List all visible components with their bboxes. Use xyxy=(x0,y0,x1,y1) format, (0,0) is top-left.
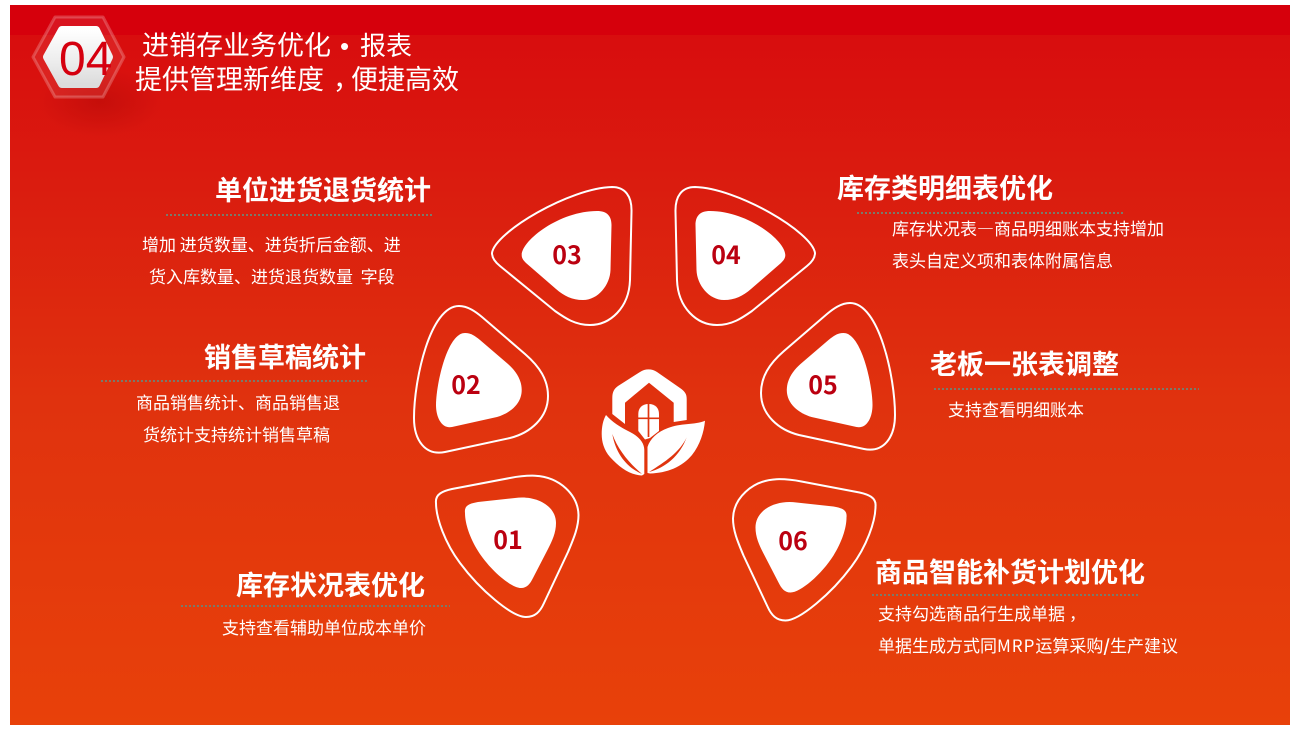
block: 商品智能补货计划优化: ， xyxy=(1069,600,1086,625)
block: 老板一张表调整: 老板一张表调整 xyxy=(930,343,1119,382)
petal 02: 02 xyxy=(451,366,481,402)
block: 单位进货退货统计 xyxy=(142,169,432,288)
title: 提供管理新维度 xyxy=(135,58,324,97)
block: 单位进货退货统计: 单位进货退货统计 xyxy=(215,169,431,208)
title: • xyxy=(340,31,349,61)
title: 便捷高效 xyxy=(351,58,459,97)
petal 04 xyxy=(675,187,815,325)
block: 商品智能补货计划优化: 商品智能补货计划优化 xyxy=(875,551,1145,590)
block: 库存状况表优化 xyxy=(181,564,450,639)
petal 03: 03 xyxy=(552,236,582,272)
block: 库存状况表优化: 库存状况表优化 xyxy=(236,564,425,603)
petal 06 xyxy=(733,479,876,620)
block: 销售草稿统计: 商品销售统计、商品销售退 xyxy=(136,389,340,414)
block: 老板一张表调整 xyxy=(930,343,1199,421)
block: 库存类明细表优化: 库存类明细表优化 xyxy=(837,167,1053,206)
block: 老板一张表调整: 支持查看明细账本 xyxy=(948,396,1084,421)
number badge: 04: 04 xyxy=(59,33,112,86)
number badge: 04 xyxy=(33,17,162,136)
petal 02 xyxy=(414,306,548,453)
title: 报表 xyxy=(360,26,412,63)
block: 销售草稿统计 xyxy=(101,336,367,446)
petal 01 xyxy=(436,476,578,617)
block: 商品智能补货计划优化: 单据生成方式同MRP运算采购/生产建议 xyxy=(878,632,1178,657)
block: 库存类明细表优化: 表头自定义项和表体附属信息 xyxy=(892,247,1113,272)
petal 03 xyxy=(492,187,632,325)
block: 库存类明细表优化: 库存状况表—商品明细账本支持增加 xyxy=(892,215,1164,240)
petal 01: 01 xyxy=(493,521,523,557)
title xyxy=(135,24,459,97)
block: 单位进货退货统计: 货入库数量、进货退货数量 字段 xyxy=(149,263,395,288)
block: 商品智能补货计划优化 xyxy=(872,551,1178,657)
petal 04: 04 xyxy=(711,236,741,272)
center logo: house and leaves xyxy=(602,369,705,476)
block: 销售草稿统计: 销售草稿统计 xyxy=(204,336,366,375)
title: ， xyxy=(333,58,360,97)
block: 销售草稿统计: 货统计支持统计销售草稿 xyxy=(143,421,330,446)
block: 库存状况表优化: 支持查看辅助单位成本单价 xyxy=(222,614,426,639)
title: 进销存业务优化 xyxy=(142,24,331,63)
petal 05: 05 xyxy=(808,366,838,402)
block: 库存类明细表优化 xyxy=(837,167,1164,272)
block: 单位进货退货统计: 增加 进货数量、进货折后金额、进 xyxy=(142,231,401,256)
petal 05 xyxy=(761,303,895,450)
petal 06: 06 xyxy=(778,522,808,558)
top band xyxy=(10,5,1290,35)
block: 商品智能补货计划优化: 支持勾选商品行生成单据 xyxy=(878,600,1065,625)
